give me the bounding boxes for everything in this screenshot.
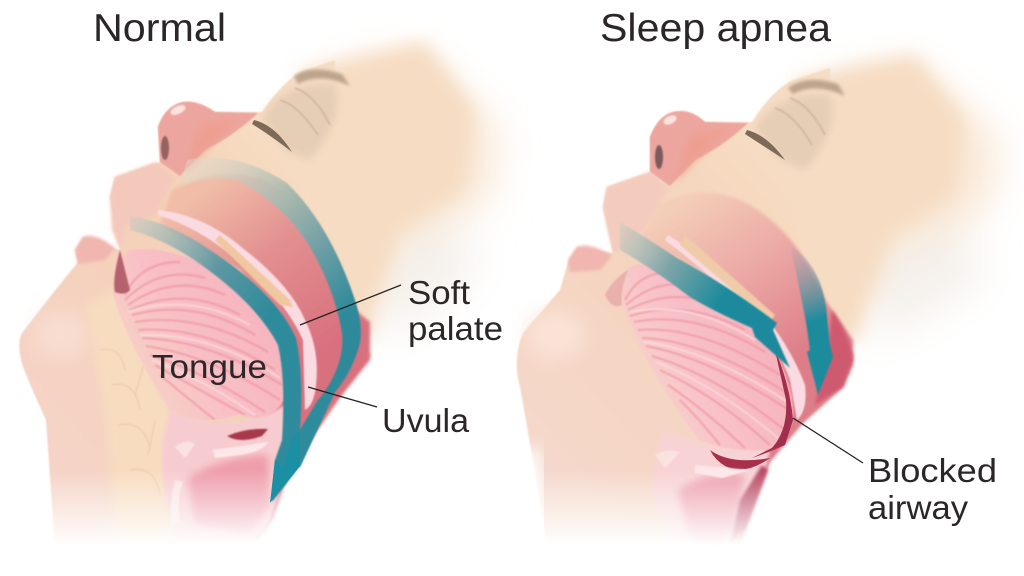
tongue — [113, 249, 287, 420]
bottom fade — [0, 470, 340, 560]
wrinkles — [775, 98, 825, 145]
chin highlight — [34, 311, 90, 359]
epiglottis cartilage — [213, 442, 268, 458]
throat cavity — [640, 192, 853, 545]
lower throat pink — [654, 430, 770, 545]
illustration: sleep apnea airway — [500, 55, 1000, 570]
far skin glow and pillow fade — [830, 65, 1000, 345]
label: Soft palate: palate — [408, 310, 503, 347]
larynx interior — [678, 474, 745, 550]
closed eye — [252, 120, 292, 152]
airflow arrow: nasal — [180, 158, 361, 467]
label: Blocked airway: Blocked — [868, 452, 997, 489]
closed eye — [745, 130, 785, 160]
fatty tissue cells — [100, 349, 160, 495]
upper lip — [110, 162, 175, 250]
head skin silhouette — [19, 60, 372, 555]
tongue — [622, 263, 793, 450]
forehead and cheek blend — [790, 55, 965, 340]
hyoid — [175, 442, 195, 458]
throat cavity — [160, 174, 370, 540]
vocal slit — [710, 450, 770, 470]
nostril — [655, 145, 663, 169]
label: Uvula: Uvula — [382, 402, 470, 439]
soft palate — [665, 235, 806, 420]
left neck fade — [36, 440, 44, 570]
larynx interior — [188, 455, 270, 535]
arrow tip accent — [270, 430, 300, 503]
forehead and cheek blend — [300, 42, 475, 340]
airflow arrow: oral blocked — [620, 222, 790, 368]
chin highlight — [527, 311, 583, 359]
dark neck wall — [815, 310, 853, 405]
thyroid cartilage — [171, 480, 183, 525]
nose — [158, 102, 258, 176]
nose highlight — [169, 103, 187, 117]
hyoid — [655, 451, 680, 468]
title: Normal: Normal — [93, 7, 226, 50]
airflow arrow: nasal blocked — [790, 245, 833, 395]
upper lip — [603, 172, 668, 253]
airflow arrow: oral with arrowhead — [130, 216, 335, 502]
eyebrow — [788, 80, 845, 96]
nose — [650, 111, 748, 186]
blocked airway dark slit — [752, 350, 793, 458]
nose highlight — [662, 113, 678, 127]
illustration: normal airway — [0, 42, 503, 570]
label line: soft palate — [300, 285, 401, 325]
label line: blocked airway — [793, 418, 863, 463]
left neck fade — [528, 450, 540, 570]
eye socket — [755, 94, 832, 170]
lower lip — [568, 246, 612, 272]
nostril — [161, 136, 169, 160]
lower lip — [75, 236, 115, 264]
hard palate bone — [215, 235, 293, 307]
lower throat pink — [162, 405, 285, 550]
eyebrow — [294, 69, 350, 86]
label: Tongue: Tongue — [152, 348, 267, 385]
fatty tissue — [85, 290, 190, 545]
label line: uvula — [308, 387, 377, 407]
bottom fade — [500, 470, 820, 560]
wrinkles — [280, 88, 330, 135]
label: Blocked airway: airway — [868, 489, 969, 526]
tongue muscle fibres — [625, 272, 792, 448]
tongue muscle fibres — [125, 262, 282, 420]
mouth opening — [114, 250, 130, 294]
epiglottis cartilage — [695, 465, 750, 478]
hard palate bone — [680, 235, 775, 322]
eye socket — [262, 84, 337, 160]
label: Soft palate: Soft — [408, 274, 470, 311]
vocal slit — [227, 429, 268, 440]
nose bridge shade — [185, 118, 240, 172]
mouth opening — [605, 270, 628, 306]
far skin glow and pillow fade — [330, 55, 500, 340]
soft palate with hard palate — [158, 210, 317, 410]
title: Sleep apnea: Sleep apnea — [600, 7, 831, 50]
esophagus — [730, 465, 768, 545]
nose bridge shade — [675, 128, 730, 182]
head skin silhouette — [517, 68, 855, 550]
